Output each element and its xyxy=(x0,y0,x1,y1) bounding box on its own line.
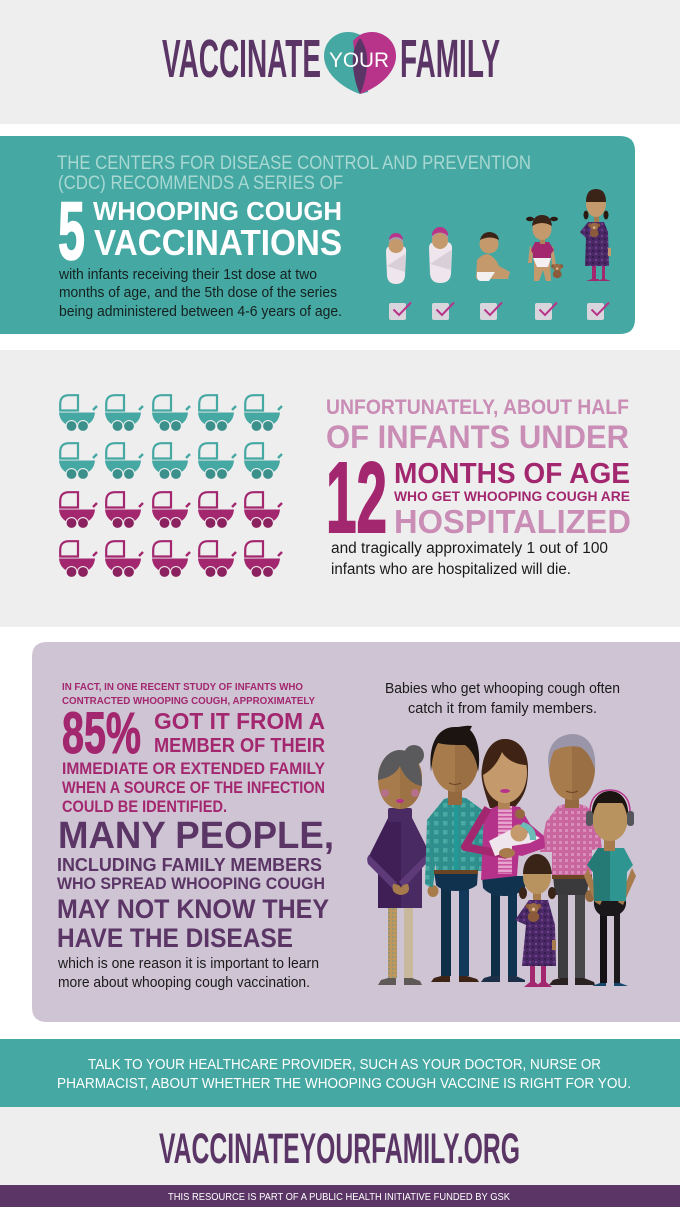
big number 12: 12 xyxy=(326,442,387,554)
logo: Vaccinate Your Family: VACCINATE xyxy=(162,29,321,89)
body text: months of age, and the 5th dose of the series xyxy=(59,285,337,301)
body text: infants who are hospitalized will die. xyxy=(331,561,571,578)
heading: many people: WHO SPREAD WHOOPING COUGH xyxy=(57,874,325,893)
swaddled baby 1 xyxy=(386,233,406,284)
heading: months of age xyxy=(394,458,631,540)
call to action text: PHARMACIST, ABOUT WHETHER THE WHOOPING COUGH VACCINE IS RIGHT FOR YOU. xyxy=(57,1075,631,1092)
panel: infant hospitalization xyxy=(0,350,680,627)
heading: many people xyxy=(57,815,334,953)
heading: many people: MANY PEOPLE, xyxy=(58,815,334,857)
sitting baby xyxy=(476,232,510,281)
heading: many people: MAY NOT KNOW THEY xyxy=(57,894,329,924)
heading: months of age: HOSPITALIZED xyxy=(394,503,631,540)
intro text xyxy=(57,153,531,194)
text: got it from a family member: IMMEDIATE OR EXTENDED FAMILY xyxy=(62,759,326,778)
funding bar xyxy=(0,1185,680,1207)
heading: months of age: MONTHS OF AGE xyxy=(394,458,630,490)
text: study intro xyxy=(62,681,315,707)
heading: whooping cough vaccinations xyxy=(93,196,342,263)
body text: with infants receiving their 1st dose at two xyxy=(58,267,317,283)
swaddled baby 2 xyxy=(429,227,452,283)
toddler with teddy bear xyxy=(526,215,563,281)
body text: which is one reason it is important to learn xyxy=(57,956,319,972)
boy with headphones xyxy=(584,790,636,986)
call to action text: TALK TO YOUR HEALTHCARE PROVIDER, SUCH AS YOUR DOCTOR, NURSE OR xyxy=(88,1056,601,1073)
illustration: family group xyxy=(367,726,636,987)
panel: family transmission xyxy=(32,642,680,1022)
intro text: (CDC) RECOMMENDS A SERIES OF xyxy=(58,173,343,194)
heading: many people: HAVE THE DISEASE xyxy=(57,923,293,953)
intro text: THE CENTERS FOR DISEASE CONTROL AND PREVENTION xyxy=(57,153,531,174)
daughter with teddy bear xyxy=(515,854,556,987)
body text: more about whooping cough vaccination. xyxy=(58,975,310,991)
body text xyxy=(58,267,342,320)
header band xyxy=(0,0,680,124)
icons: children at each vaccine dose xyxy=(386,189,611,284)
body text xyxy=(331,540,608,578)
caption: babies catch it from family: catch it from family members. xyxy=(408,701,597,717)
heading: whooping cough vaccinations: VACCINATIONS xyxy=(94,222,342,263)
text: got it from a family member: MEMBER OF THEIR xyxy=(154,735,325,757)
girl with teddy bear xyxy=(580,189,611,281)
logo: Vaccinate Your Family: YOUR xyxy=(329,49,389,72)
text: got it from a family member: GOT IT FROM A xyxy=(154,708,325,734)
pictogram: strollers xyxy=(59,395,282,578)
funding statement: THIS RESOURCE IS PART OF A PUBLIC HEALTH INITIATIVE FUNDED BY GSK xyxy=(168,1191,510,1203)
body text xyxy=(57,956,319,991)
text: study intro: CONTRACTED WHOOPING COUGH, APPROXIMATELY xyxy=(62,695,315,707)
text: study intro: IN FACT, IN ONE RECENT STUDY OF INFANTS WHO xyxy=(62,681,303,693)
website footer band xyxy=(0,1107,680,1185)
heading: half of infants: OF INFANTS UNDER xyxy=(326,419,629,455)
body text: being administered between 4-6 years of age. xyxy=(59,304,342,320)
grandmother xyxy=(367,745,432,985)
text: got it from a family member: WHEN A SOURCE OF THE INFECTION xyxy=(62,778,325,797)
call to action band xyxy=(0,1039,680,1107)
panel: CDC recommendation xyxy=(0,136,635,334)
father xyxy=(425,726,484,982)
heading: half of infants xyxy=(326,396,629,455)
caption: babies catch it from family: Babies who get whooping cough often xyxy=(385,681,620,697)
heading: half of infants: UNFORTUNATELY, ABOUT HALF xyxy=(326,396,629,419)
big number 85%: 85% xyxy=(62,701,141,766)
checkboxes xyxy=(389,302,609,320)
big number 5: 5 xyxy=(58,184,85,277)
logo: Vaccinate Your Family: FAMILY xyxy=(400,29,500,89)
heading: months of age: WHO GET WHOOPING COUGH ARE xyxy=(394,488,630,504)
mother with infant xyxy=(465,739,545,982)
heading: whooping cough vaccinations: WHOOPING COUGH xyxy=(93,196,342,226)
grandfather xyxy=(540,734,602,985)
body text: and tragically approximately 1 out of 100 xyxy=(331,540,608,557)
text: got it from a family member: COULD BE IDENTIFIED. xyxy=(62,797,227,816)
text: got it from a family member xyxy=(62,708,326,816)
heading: many people: INCLUDING FAMILY MEMBERS xyxy=(57,854,322,875)
call to action text xyxy=(57,1056,631,1092)
caption: babies catch it from family xyxy=(385,681,620,717)
